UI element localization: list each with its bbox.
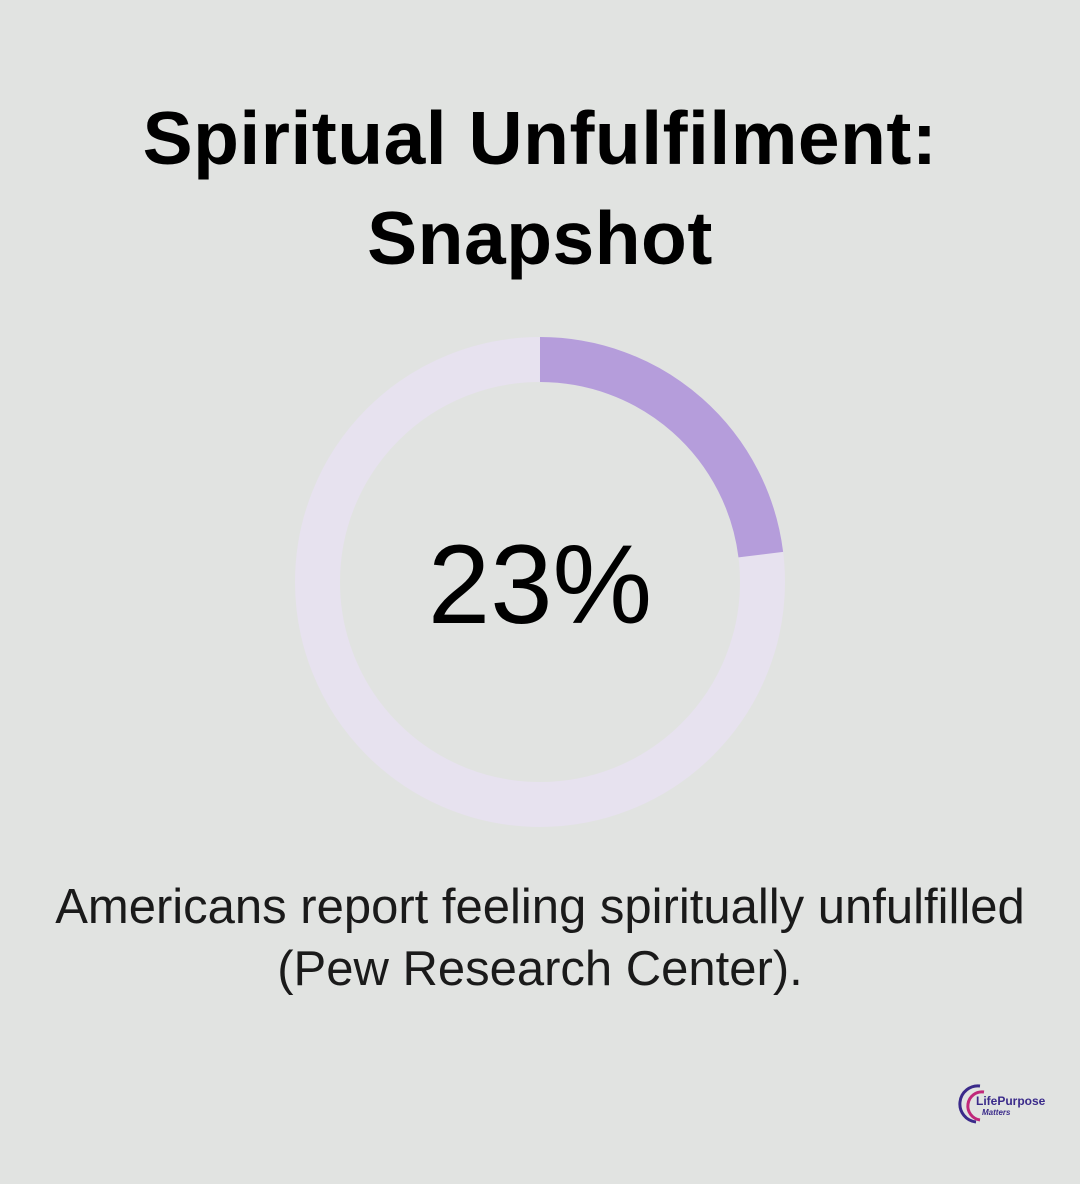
title: Snapshot xyxy=(367,196,713,280)
logo: LifePurpose xyxy=(976,1094,1045,1108)
description text xyxy=(55,880,1025,996)
title: Spiritual Unfulfilment: xyxy=(143,96,937,180)
logo xyxy=(958,1084,1045,1124)
logo: Matters xyxy=(982,1108,1010,1117)
description text: Americans report feeling spiritually unfulfilled xyxy=(55,880,1025,934)
percentage value: 23% xyxy=(428,522,652,647)
title xyxy=(143,96,937,280)
description text: (Pew Research Center). xyxy=(277,942,803,996)
